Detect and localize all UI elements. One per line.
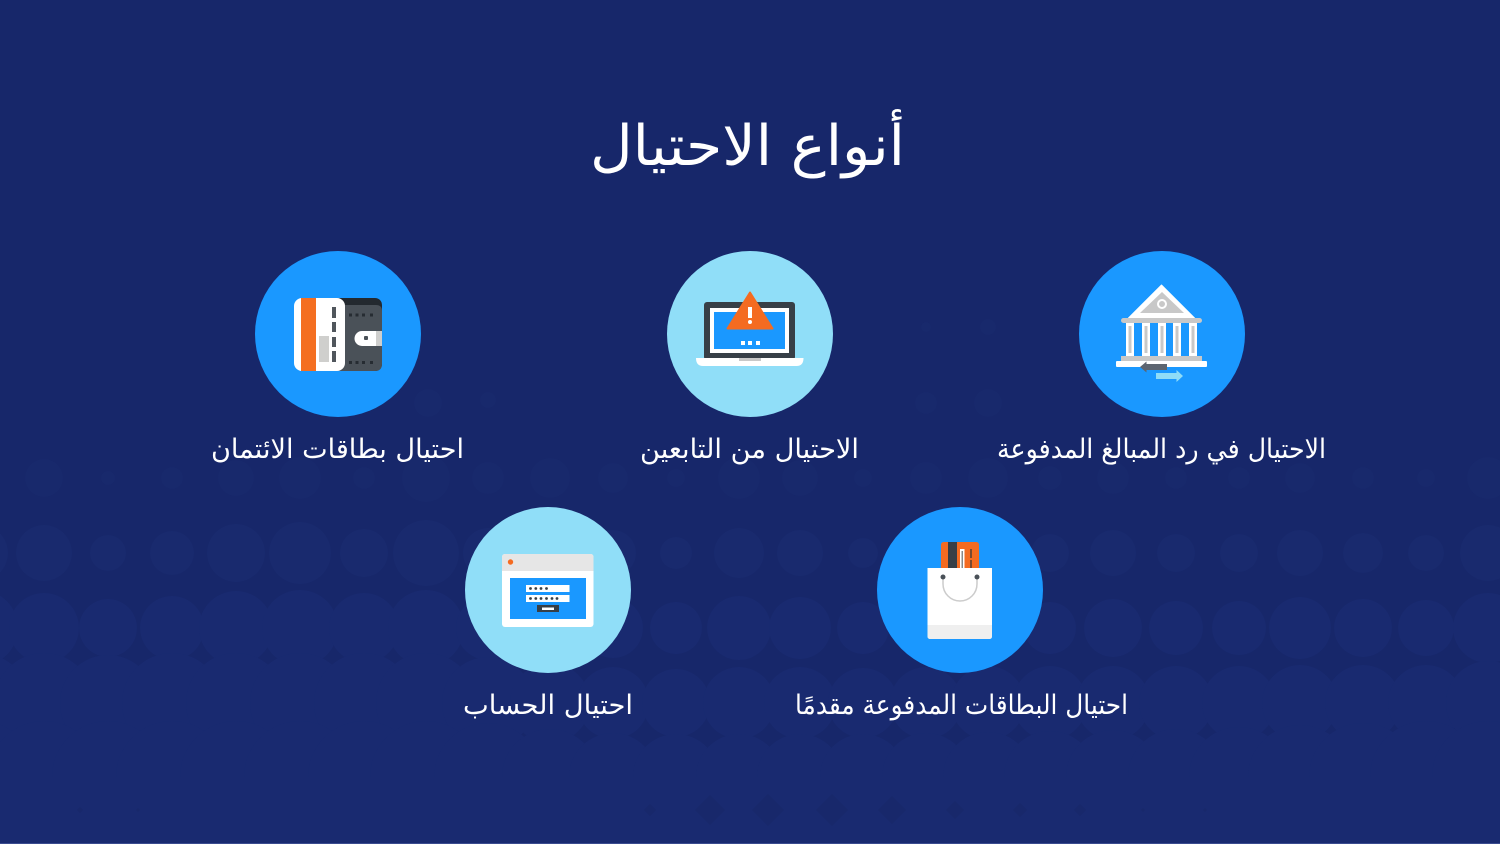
label: احتيال بطاقات الائتمان [211, 434, 464, 465]
icon: laptop with warning [667, 251, 833, 417]
item: prepaid card fraud [795, 507, 1128, 721]
label: الاحتيال في رد المبالغ المدفوعة [997, 434, 1326, 465]
label: الاحتيال من التابعين [640, 434, 859, 465]
label: احتيال البطاقات المدفوعة مقدمًا [795, 690, 1128, 721]
item: account fraud [463, 507, 633, 721]
icon: login window [465, 507, 631, 673]
item: credit card fraud [211, 251, 464, 465]
arrow: incoming [1156, 370, 1183, 382]
label: احتيال الحساب [463, 690, 633, 721]
icon: wallet and card [255, 251, 421, 417]
arrow: outgoing [1140, 362, 1167, 372]
icon: shopping bag with card [877, 507, 1043, 673]
title: أنواع الاحتيال [590, 109, 905, 179]
item: affiliate fraud [640, 251, 859, 465]
item: refund fraud [997, 251, 1326, 465]
icon: bank with arrows [1079, 251, 1245, 417]
